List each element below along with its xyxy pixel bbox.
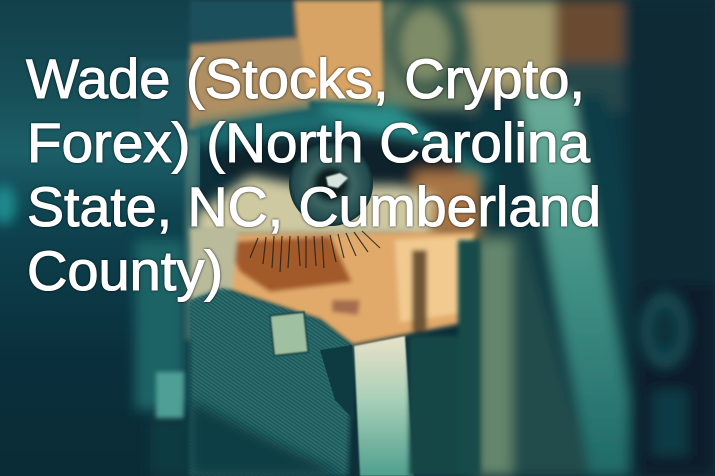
- bright teal patch at lower left: [156, 372, 184, 418]
- blurred banknotes on the right: [380, 0, 715, 476]
- eyelashes: [250, 231, 380, 272]
- title line 4: County): [27, 239, 223, 302]
- lower banknote with engraving: [190, 288, 354, 476]
- left banknote column: [0, 185, 190, 476]
- title: [26, 47, 601, 302]
- orange skin band below the eye: [190, 228, 475, 345]
- skin tones and upper tan panel: [140, 0, 384, 132]
- title line 2: Forex) (North Carolina: [27, 111, 591, 174]
- teal brow band: [190, 100, 495, 195]
- cream vertical strip: [354, 336, 414, 476]
- title line 1: Wade (Stocks, Crypto,: [26, 47, 585, 110]
- dark eye socket: [220, 135, 482, 238]
- eye: sclera, iris and pupil: [185, 135, 435, 340]
- dark serial strip next to cream strip: [409, 240, 480, 476]
- title line 3: State, NC, Cumberland: [27, 175, 601, 238]
